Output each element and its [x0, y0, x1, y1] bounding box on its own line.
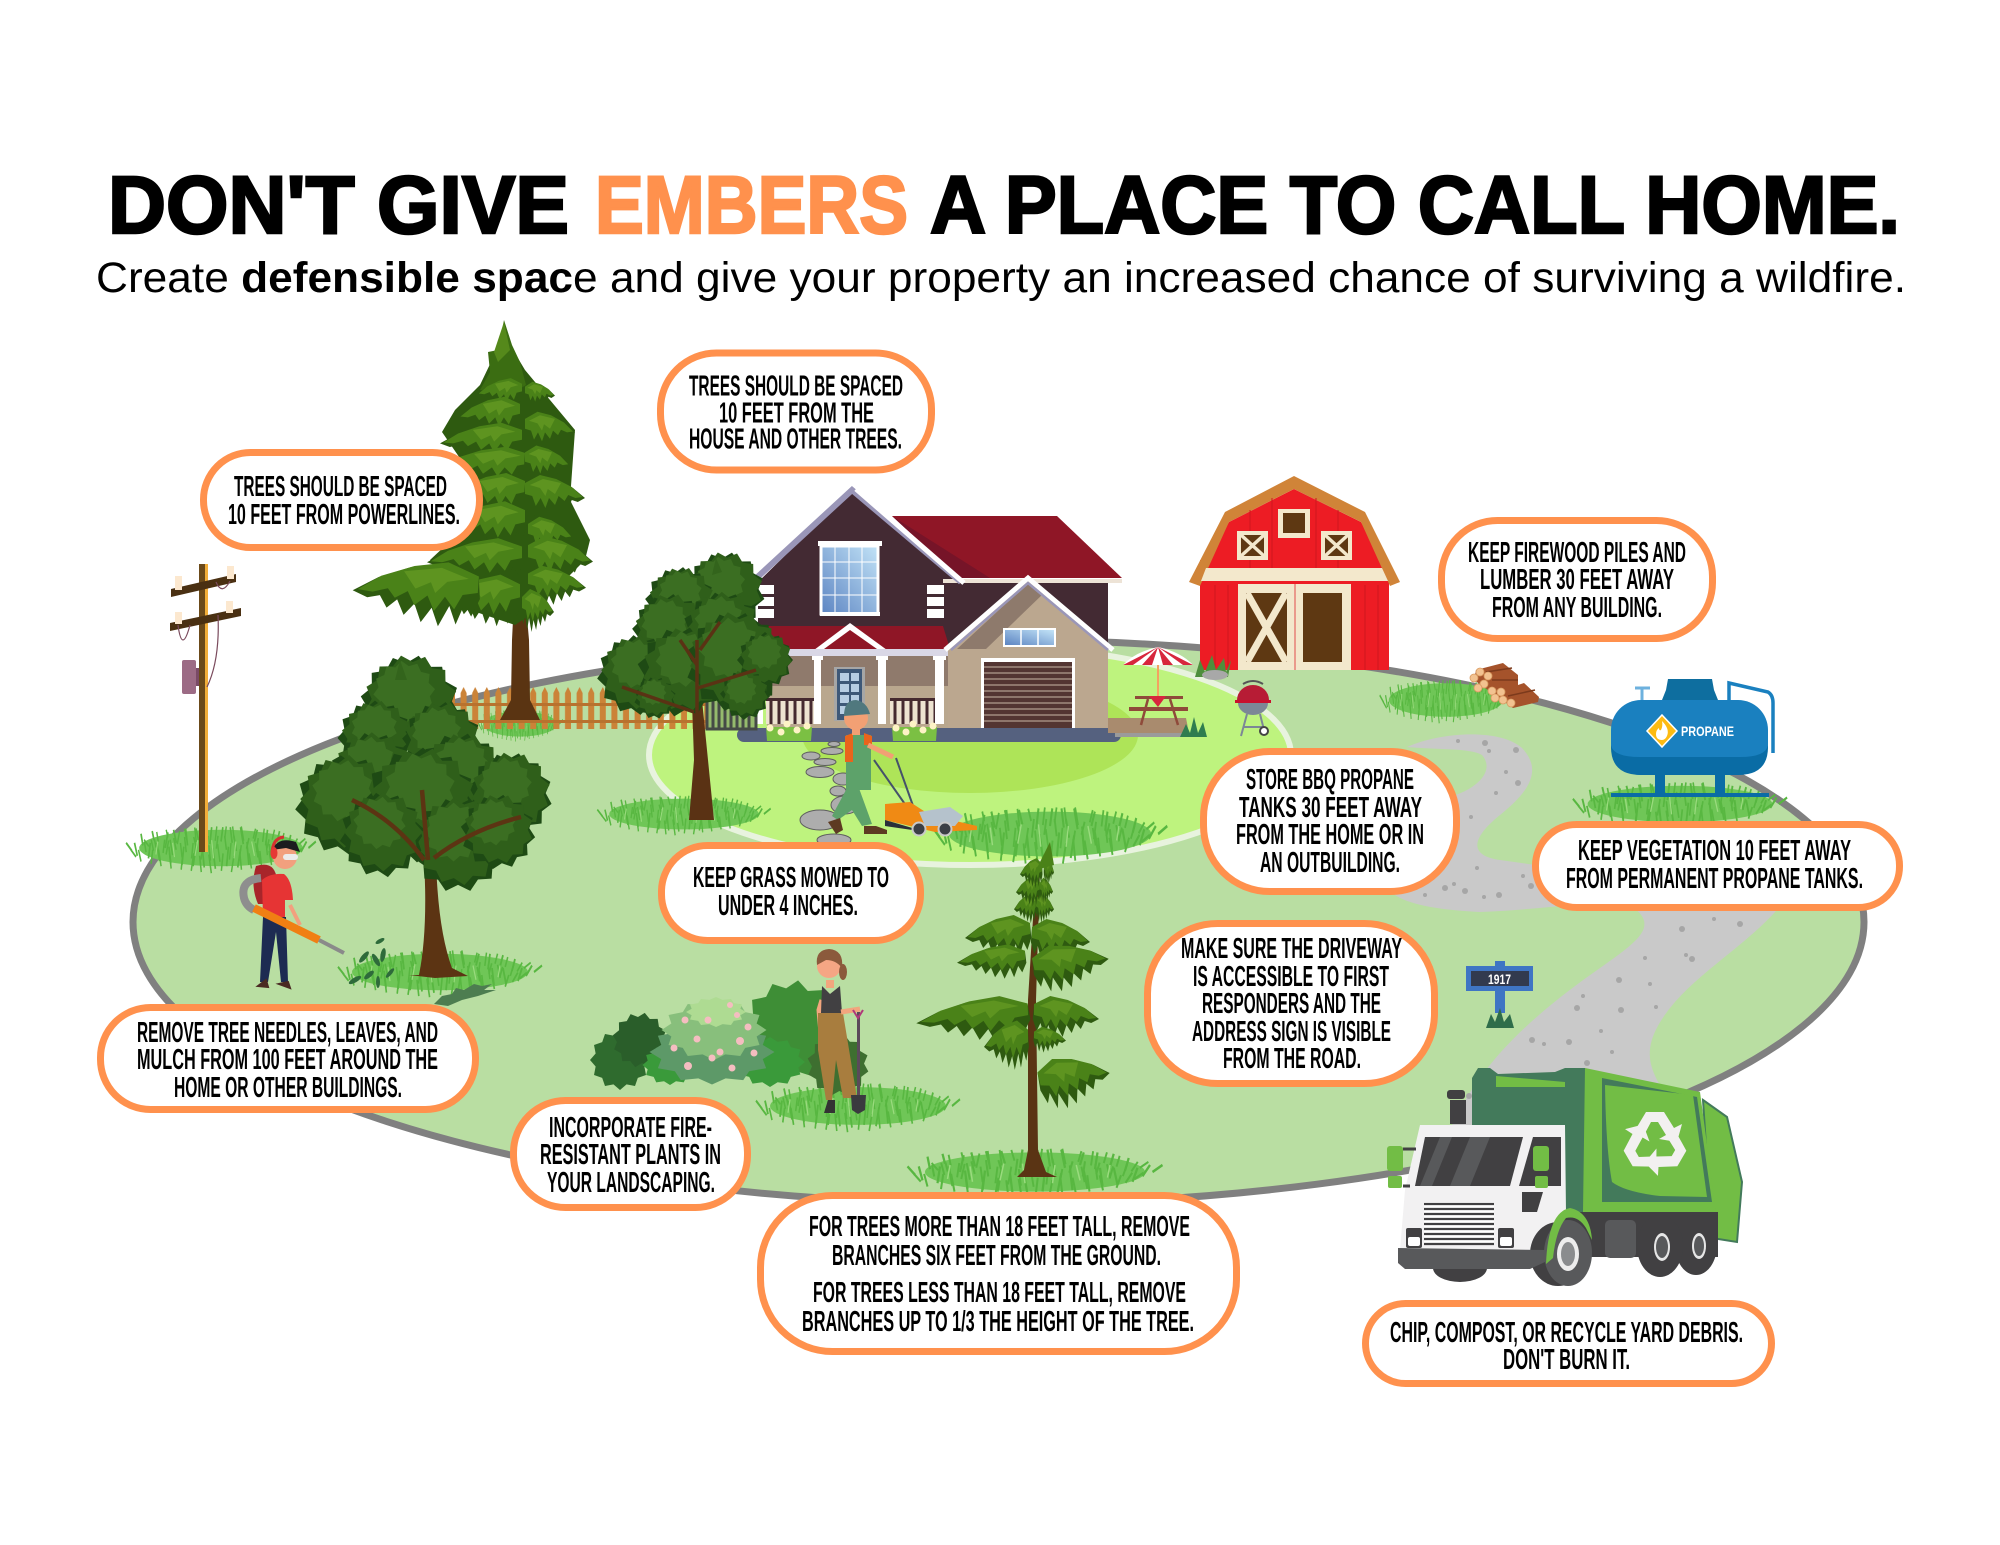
fender — [1546, 1208, 1592, 1264]
address sign — [1466, 961, 1533, 1028]
subtitle: Create defensible space and give your property an increased chance of surviving a wildfire. — [96, 254, 1906, 302]
barn shrub and rocks — [1195, 655, 1231, 680]
bumper — [1398, 1248, 1547, 1269]
callout: powerlines spacing — [204, 452, 480, 548]
callout: vegetation near tanks — [1536, 824, 1900, 908]
plant — [1180, 717, 1207, 737]
barn beam — [1201, 568, 1388, 581]
woman gardener with shovel — [817, 949, 866, 1114]
gable trim white — [856, 489, 964, 583]
callout: BBQ propane: TANKS 30 FEET AWAY — [1239, 792, 1422, 824]
callout: remove needles: REMOVE TREE NEEDLES, LEAVES, AND — [137, 1017, 438, 1049]
barn X window right — [1321, 531, 1352, 560]
callout: driveway: ADDRESS SIGN IS VISIBLE — [1192, 1016, 1391, 1048]
main red roof — [892, 516, 1122, 578]
stepping stones — [800, 742, 859, 846]
callout: fire-resistant plants — [514, 1100, 748, 1208]
garage door — [981, 658, 1075, 728]
porch columns — [756, 656, 946, 724]
porch railings — [766, 698, 937, 724]
small pine tree — [915, 842, 1115, 1177]
recycle symbol — [1615, 1112, 1692, 1182]
callout: house spacing: TREES SHOULD BE SPACED — [689, 370, 903, 402]
grille — [1424, 1202, 1494, 1245]
callout: tree pruning: BRANCHES SIX FEET FROM THE GROUND. — [832, 1240, 1161, 1272]
callout: firewood: LUMBER 30 FEET AWAY — [1480, 564, 1674, 596]
callout: mowed grass: KEEP GRASS MOWED TO — [693, 862, 889, 894]
headlights — [1406, 1228, 1514, 1248]
porch wall — [767, 656, 948, 728]
garage wing — [948, 580, 1108, 728]
barbecue grill — [1235, 681, 1271, 736]
callout: fire-resistant plants: YOUR LANDSCAPING. — [547, 1167, 715, 1199]
deck — [1108, 718, 1189, 737]
callout: house spacing — [660, 353, 932, 470]
garage gable shadow — [957, 583, 1044, 649]
utility pole — [170, 564, 241, 852]
front lawn — [649, 645, 1291, 865]
callout: driveway — [1148, 924, 1434, 1084]
panel face — [1605, 1085, 1707, 1197]
gable trim — [751, 490, 961, 583]
back wall — [758, 490, 1108, 660]
roof fascia — [943, 579, 1122, 583]
callout: BBQ propane: STORE BBQ PROPANE — [1246, 764, 1414, 796]
rear wheels — [1605, 1215, 1717, 1277]
windshield — [1415, 1137, 1523, 1186]
title: EMBERS — [595, 160, 908, 251]
big broadleaf tree — [276, 640, 564, 978]
title: DON'T GIVE — [108, 160, 569, 251]
garage gable trim shade — [951, 583, 1108, 650]
mower — [874, 758, 977, 836]
mirrors — [1387, 1146, 1549, 1188]
porch gable — [814, 623, 887, 650]
callout: tree pruning — [760, 1196, 1236, 1352]
callout: firewood: FROM ANY BUILDING. — [1492, 592, 1662, 624]
callout: firewood — [1442, 520, 1712, 638]
picnic table — [1129, 696, 1188, 725]
roof shadow — [892, 516, 990, 578]
callout: house spacing: HOUSE AND OTHER TREES. — [689, 424, 902, 456]
front wheel — [1530, 1220, 1592, 1286]
man mowing the lawn — [828, 700, 977, 836]
iron gate — [707, 683, 756, 729]
man with leaf blower — [243, 837, 344, 988]
propane tank — [1611, 679, 1773, 797]
bushes — [590, 974, 875, 1102]
grass patches — [126, 680, 1787, 1199]
truck side — [1583, 1068, 1718, 1227]
callout: tree pruning: FOR TREES LESS THAN 18 FEET TALL, REMOVE — [813, 1277, 1186, 1309]
upper window — [818, 541, 882, 616]
firewood pile — [1470, 663, 1539, 708]
mower man legs — [832, 780, 872, 826]
callout: fire-resistant plants: INCORPORATE FIRE- — [549, 1112, 712, 1144]
callout: driveway: IS ACCESSIBLE TO FIRST — [1193, 961, 1389, 993]
barn doors — [1238, 584, 1351, 670]
truck cab — [1400, 1125, 1566, 1250]
callout: tree pruning: FOR TREES MORE THAN 18 FEET TALL, REMOVE — [809, 1211, 1190, 1243]
title: A PLACE TO CALL HOME. — [930, 160, 1900, 251]
yard ground — [133, 640, 1864, 1204]
side panel — [1602, 1078, 1712, 1202]
propane tank: PROPANE — [1681, 723, 1734, 739]
callout: mowed grass: UNDER 4 INCHES. — [718, 890, 858, 922]
umbrella — [1123, 647, 1193, 665]
callout: house spacing: 10 FEET FROM THE — [719, 398, 874, 430]
garbage truck — [1387, 1068, 1742, 1286]
callout: remove needles: MULCH FROM 100 FEET AROUND THE — [137, 1044, 438, 1076]
foundation — [737, 728, 1121, 742]
umbrella pole — [1157, 660, 1159, 698]
callout: driveway: MAKE SURE THE DRIVEWAY — [1181, 933, 1402, 965]
barn loft window — [1278, 509, 1310, 538]
front door — [834, 667, 865, 721]
callout: powerlines spacing: 10 FEET FROM POWERLINES. — [228, 499, 460, 531]
callout: remove needles: HOME OR OTHER BUILDINGS. — [174, 1072, 402, 1104]
callout: yard debris — [1366, 1304, 1772, 1384]
callout: mowed grass — [662, 846, 920, 940]
wooden picket fence — [412, 687, 708, 729]
barn X window left — [1237, 531, 1268, 560]
under-bumper wheel — [1433, 1254, 1487, 1282]
garage gable trim — [945, 578, 1113, 650]
porch roof — [758, 626, 950, 649]
porch beam — [785, 649, 954, 656]
house — [737, 489, 1122, 742]
address sign: 1917 — [1488, 971, 1511, 987]
truck body rear — [1703, 1100, 1742, 1242]
callout: remove needles — [100, 1008, 476, 1110]
garage window — [1003, 628, 1056, 647]
tall pine tree — [351, 320, 593, 720]
blown leaves and needles — [348, 937, 496, 1006]
cab side window — [1519, 1137, 1561, 1212]
callout: BBQ propane: AN OUTBUILDING. — [1260, 847, 1400, 879]
barn — [1189, 476, 1400, 680]
callout: fire-resistant plants: RESISTANT PLANTS IN — [540, 1139, 721, 1171]
broadleaf tree near house — [582, 540, 806, 820]
shutters — [757, 585, 944, 618]
mirror arm — [1403, 1149, 1416, 1186]
flower boxes — [766, 720, 937, 741]
truck box — [1472, 1068, 1590, 1213]
picnic area — [1108, 647, 1207, 737]
callout: powerlines spacing: TREES SHOULD BE SPACED — [234, 471, 447, 503]
exhaust stack — [1447, 1090, 1466, 1124]
callout: BBQ propane: FROM THE HOME OR IN — [1236, 819, 1424, 851]
callout: firewood: KEEP FIREWOOD PILES AND — [1468, 537, 1686, 569]
truck box accent — [1496, 1076, 1565, 1087]
callout: tree pruning: BRANCHES UP TO 1/3 THE HEIGHT OF THE TREE. — [802, 1306, 1194, 1338]
chassis — [1563, 1212, 1718, 1257]
callout: BBQ propane — [1204, 752, 1456, 892]
title — [108, 160, 1900, 251]
callout: driveway: FROM THE ROAD. — [1223, 1043, 1361, 1075]
gravel driveway — [1395, 734, 1785, 1130]
callout: yard debris: DON'T BURN IT. — [1503, 1344, 1630, 1376]
callout: driveway: RESPONDERS AND THE — [1202, 988, 1381, 1020]
